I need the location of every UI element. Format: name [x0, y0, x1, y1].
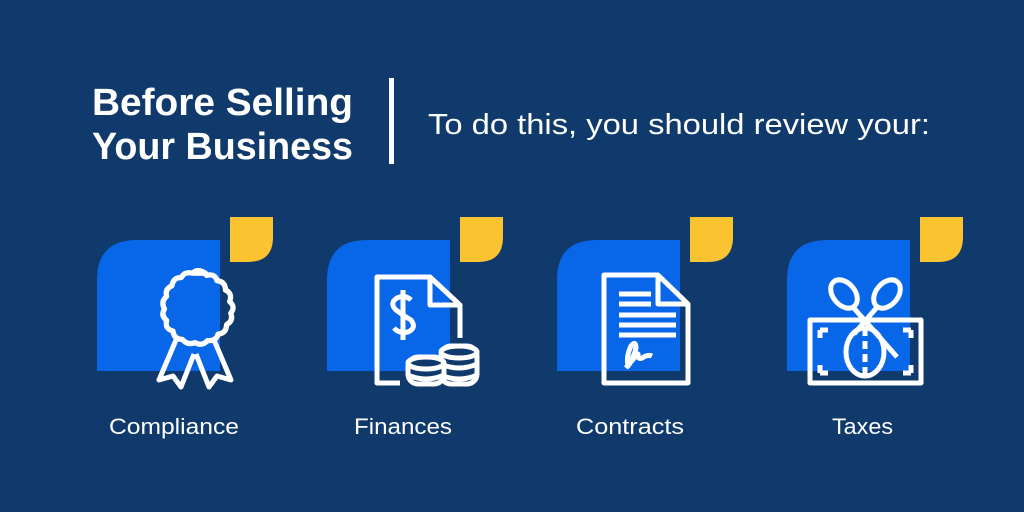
- title: Your Business: [92, 126, 353, 168]
- card: taxes: [787, 217, 963, 439]
- label: Contracts: [576, 414, 684, 439]
- title: Before Selling: [92, 82, 353, 124]
- icon: scissors cutting bill: [810, 275, 921, 383]
- label: Finances: [354, 414, 452, 439]
- label: Compliance: [109, 414, 239, 439]
- label: Taxes: [832, 414, 893, 439]
- icon: signed document: [604, 275, 688, 383]
- title: [92, 82, 353, 168]
- subtitle: To do this, you should review your:: [428, 109, 930, 141]
- card: compliance: [97, 217, 273, 439]
- icon: invoice with coins: [377, 277, 477, 384]
- vertical divider: [389, 78, 394, 164]
- icon: rosette: [159, 271, 233, 387]
- card: finances: [327, 217, 503, 439]
- card: contracts: [557, 217, 733, 439]
